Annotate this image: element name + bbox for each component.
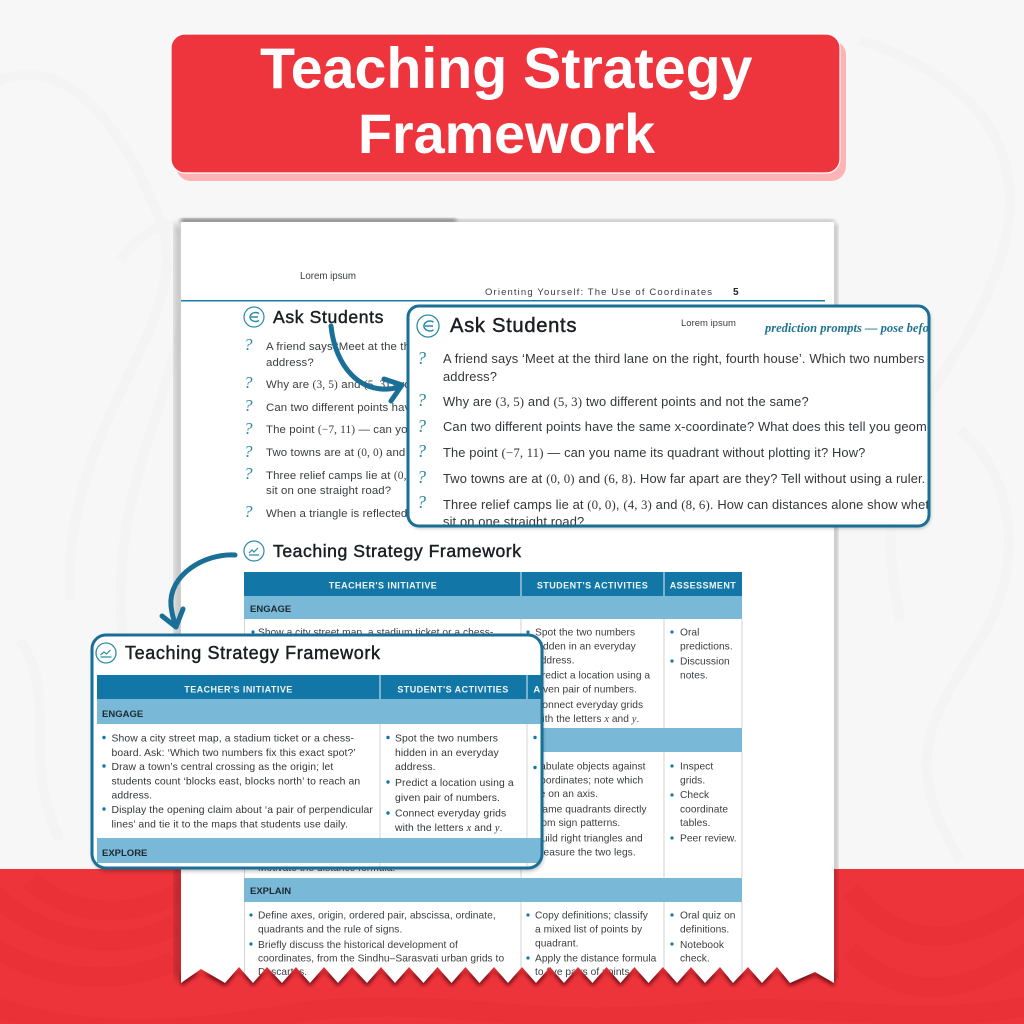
explain row: quadrants and the rule of signs. [258, 924, 402, 936]
callout table: Connect everyday grids [395, 808, 506, 820]
engage row: notes. [680, 670, 708, 682]
framework table: TEACHER'S INITIATIVE [329, 580, 437, 590]
question list: ? [244, 502, 253, 521]
page header: Lorem ipsum [300, 271, 356, 282]
section heading: teaching strategy framework: Teaching Strategy Framework [273, 541, 521, 561]
explain row [249, 910, 736, 978]
callout table: lines’ and tie it to the maps that students use daily. [112, 820, 348, 830]
callout panel: teaching strategy framework [92, 635, 543, 871]
engage row: Connect everyday grids [535, 700, 643, 711]
callout questions: ? [417, 390, 426, 410]
callout table: given pair of numbers. [395, 793, 500, 804]
framework table: EXPLAIN [250, 886, 291, 897]
question list: Two towns are at (0, 0) and (6, 8). [266, 447, 437, 459]
callout table: hidden in an everyday [395, 748, 499, 759]
explore row: coordinate [680, 804, 728, 816]
callout heading: prediction prompts — pose before the lesson [764, 321, 994, 335]
callout table: Show a city street map, a stadium ticket or a chess- [112, 734, 354, 744]
explore row: Motivate the distance formula. [258, 863, 395, 874]
explore row: Name quadrants directly [535, 804, 647, 816]
question list: Can two different points have the same x-coordinate? [266, 402, 542, 414]
arrow: framework heading to callout [162, 555, 235, 627]
explain row: Descartes. [258, 967, 307, 978]
explain row: quadrant. [535, 938, 578, 950]
explain row: Notebook [680, 940, 725, 951]
title banner: Framework [358, 103, 656, 165]
callout heading: Ask Students [450, 315, 577, 337]
engage row [251, 628, 733, 725]
callout heading [417, 315, 994, 337]
callout table: address. [112, 790, 152, 802]
question list: ? [244, 464, 253, 483]
callout questions: A friend says ‘Meet at the third lane on the right, fourth house’. Which two numbers fix this [443, 351, 966, 366]
engage row: Discussion [680, 656, 730, 668]
question list: ? [244, 442, 253, 461]
callout heading: Teaching Strategy Framework [125, 643, 381, 663]
callout questions [420, 352, 928, 524]
explore row: Peer review. [680, 834, 737, 844]
callout questions: ? [417, 492, 426, 512]
question list: ? [244, 396, 253, 415]
question list: The point (−7, 11) — can you name its quadrant? [266, 424, 517, 436]
engage row: Oral [680, 628, 699, 638]
question list: address? [266, 357, 314, 369]
callout table: students count ‘blocks east, blocks north’ to reach an [112, 776, 360, 788]
title banner: Teaching Strategy [260, 37, 753, 101]
callout table [97, 675, 541, 868]
callout table: EXPLORE [102, 848, 147, 859]
explain row: definitions. [680, 924, 729, 936]
callout table: board. Ask: ‘Which two numbers fix this exact spot?’ [112, 748, 356, 759]
engage row: Show a city street map, a stadium ticket or a chess- [258, 628, 493, 638]
question list: Three relief camps lie at (0, 0), (4, 3) and (8, 6). [266, 470, 506, 482]
explain row: a mixed list of points by [535, 924, 643, 936]
callout panel: ask students [408, 306, 994, 529]
page header: Orienting Yourself: The Use of Coordinates [485, 287, 712, 298]
explore row: grids. [680, 776, 705, 787]
framework table: STUDENT'S ACTIVITIES [537, 580, 648, 590]
explore row [258, 762, 737, 874]
callout table: STUDENT'S ACTIVITIES [397, 684, 509, 694]
engage row: with the letters x and y. [534, 714, 639, 725]
explore row: tables. [680, 818, 710, 829]
callout table: Predict a location using a [395, 778, 514, 789]
explore row: measure the two legs. [535, 848, 636, 858]
question list: When a triangle is reflected in an axis, what stays the same? [266, 508, 579, 520]
question list: ? [244, 419, 253, 438]
callout questions: Can two different points have the same x-coordinate? What does this tell you geometrically? [443, 419, 979, 434]
callout table: Spot the two numbers [395, 734, 498, 744]
page shadow [174, 218, 838, 986]
engage row: Spot the two numbers [535, 628, 635, 638]
background: red lower band [0, 869, 1024, 1024]
callout table: A [533, 684, 541, 696]
page header [181, 271, 825, 302]
explore row: coordinates; note which [535, 776, 643, 787]
engage row: Predict a location using a [535, 670, 650, 682]
page header: 5 [733, 287, 739, 298]
explore row: Inspect [680, 762, 713, 772]
callout table: Display the opening claim about ‘a pair of perpendicular [112, 805, 373, 816]
explain row: Oral quiz on [680, 910, 736, 922]
question list: sit on one straight road? [266, 485, 391, 497]
question list: ? [244, 335, 253, 354]
framework table: ENGAGE [250, 604, 291, 615]
explain row: Briefly discuss the historical development of [258, 940, 458, 951]
engage row: predictions. [680, 642, 733, 652]
callout questions: sit on one straight road? [443, 514, 584, 529]
explore row: Build right triangles and [535, 834, 643, 844]
callout questions: The point (−7, 11) — can you name its quadrant without plotting it? How? [443, 445, 865, 460]
question list: Why are (3, 5) and (5, 3) two different points? [266, 379, 497, 391]
callout questions: Why are (3, 5) and (5, 3) two different points and not the same? [443, 394, 809, 409]
callout table: with the letters x and y. [394, 823, 503, 834]
callout table: TEACHER'S INITIATIVE [184, 684, 293, 694]
explore row: Tabulate objects against [535, 762, 646, 772]
callout questions: ? [417, 416, 426, 436]
explore row: from sign patterns. [535, 818, 620, 829]
engage row: address. [535, 656, 574, 666]
engage row: given pair of numbers. [535, 684, 637, 696]
framework table [244, 572, 742, 990]
explore row: lie on an axis. [535, 789, 598, 800]
callout questions: ? [417, 348, 426, 368]
callout table: address. [395, 762, 436, 773]
callout questions: Three relief camps lie at (0, 0), (4, 3) and (8, 6). How can distances alone show whether they [443, 497, 977, 512]
question list: ? [244, 373, 253, 392]
callout heading: Lorem ipsum [681, 318, 736, 329]
explain row: Apply the distance formula [535, 954, 657, 964]
callout table: Draw a town’s central crossing as the origin; let [112, 762, 333, 773]
engage row: hidden in an everyday [535, 642, 637, 652]
callout questions: ? [417, 441, 426, 461]
callout table: ENGAGE [102, 709, 143, 720]
question list [246, 339, 406, 520]
explore row: Check [680, 790, 710, 801]
callout questions: address? [443, 369, 497, 384]
arrow: ask students to callout [331, 326, 402, 401]
explain row: Define axes, origin, ordered pair, abscissa, ordinate, [258, 910, 496, 922]
document page [181, 222, 834, 990]
title banner [171, 34, 846, 181]
framework table: ASSESSMENT [670, 580, 736, 590]
section heading: ask students: Ask Students [273, 307, 384, 327]
explain row: Copy definitions; classify [535, 910, 649, 922]
explain row: check. [680, 954, 710, 964]
explain row: to five pairs of points. [535, 967, 632, 978]
explain row: coordinates, from the Sindhu–Sarasvati urban grids to [258, 954, 504, 964]
question list: A friend says ‘Meet at the third lane on the right, fourth house’. [266, 341, 587, 353]
callout questions: Two towns are at (0, 0) and (6, 8). How far apart are they? Tell without using a ruler. [443, 471, 925, 486]
callout questions: ? [417, 467, 426, 487]
